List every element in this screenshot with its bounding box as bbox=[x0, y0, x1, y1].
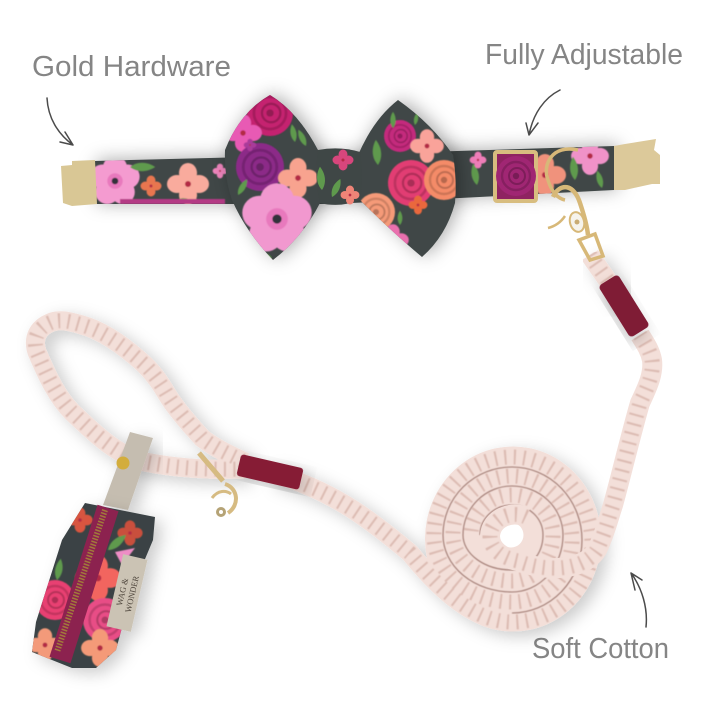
arrow: to adjustable slider bbox=[526, 90, 560, 135]
arrow: to gold buckle bbox=[47, 98, 73, 145]
arrow: to soft cotton rope bbox=[631, 573, 646, 627]
long rope leaving coil centre bbox=[490, 335, 652, 568]
collar band bbox=[93, 146, 614, 204]
rope upper segment to clasp bbox=[590, 255, 624, 306]
leash rope with coil bbox=[35, 255, 652, 632]
coil strand twists bbox=[270, 457, 592, 622]
small gold ring and charm bbox=[199, 453, 236, 516]
heading: Soft Cotton: Soft Cotton bbox=[532, 633, 669, 665]
left wing flowers bbox=[224, 90, 318, 260]
right bow wing bbox=[356, 100, 464, 257]
pouch zipper bbox=[60, 508, 108, 660]
collar floral print bbox=[95, 146, 610, 204]
left bow wing bbox=[224, 90, 320, 260]
waste bag pouch bbox=[28, 503, 155, 668]
pouch floral print bbox=[28, 507, 143, 667]
right side-release buckle bbox=[614, 139, 660, 190]
rope hand loop bbox=[35, 321, 245, 469]
heading: Gold Hardware: Gold Hardware bbox=[32, 51, 231, 83]
maroon wrap lower bbox=[236, 454, 304, 490]
pouch brand label: WONDER bbox=[123, 575, 141, 613]
bow centre knot bbox=[316, 148, 362, 205]
pouch brand label bbox=[106, 554, 148, 632]
dog collar with bow bbox=[61, 90, 660, 260]
strap snap bbox=[116, 456, 130, 470]
coil seams between turns bbox=[443, 467, 582, 613]
left side-release buckle bbox=[61, 160, 97, 206]
coil hole bbox=[498, 522, 524, 548]
pouch strap bbox=[103, 432, 153, 510]
d-ring and clasp bbox=[546, 149, 603, 260]
right wing flowers bbox=[360, 112, 456, 244]
pouch brand label: WAG & bbox=[114, 577, 130, 607]
heading: Fully Adjustable: Fully Adjustable bbox=[485, 39, 683, 71]
square slider buckle bbox=[495, 152, 536, 201]
rope lower run and coil disc bbox=[270, 446, 601, 632]
maroon wrap upper bbox=[598, 274, 650, 338]
